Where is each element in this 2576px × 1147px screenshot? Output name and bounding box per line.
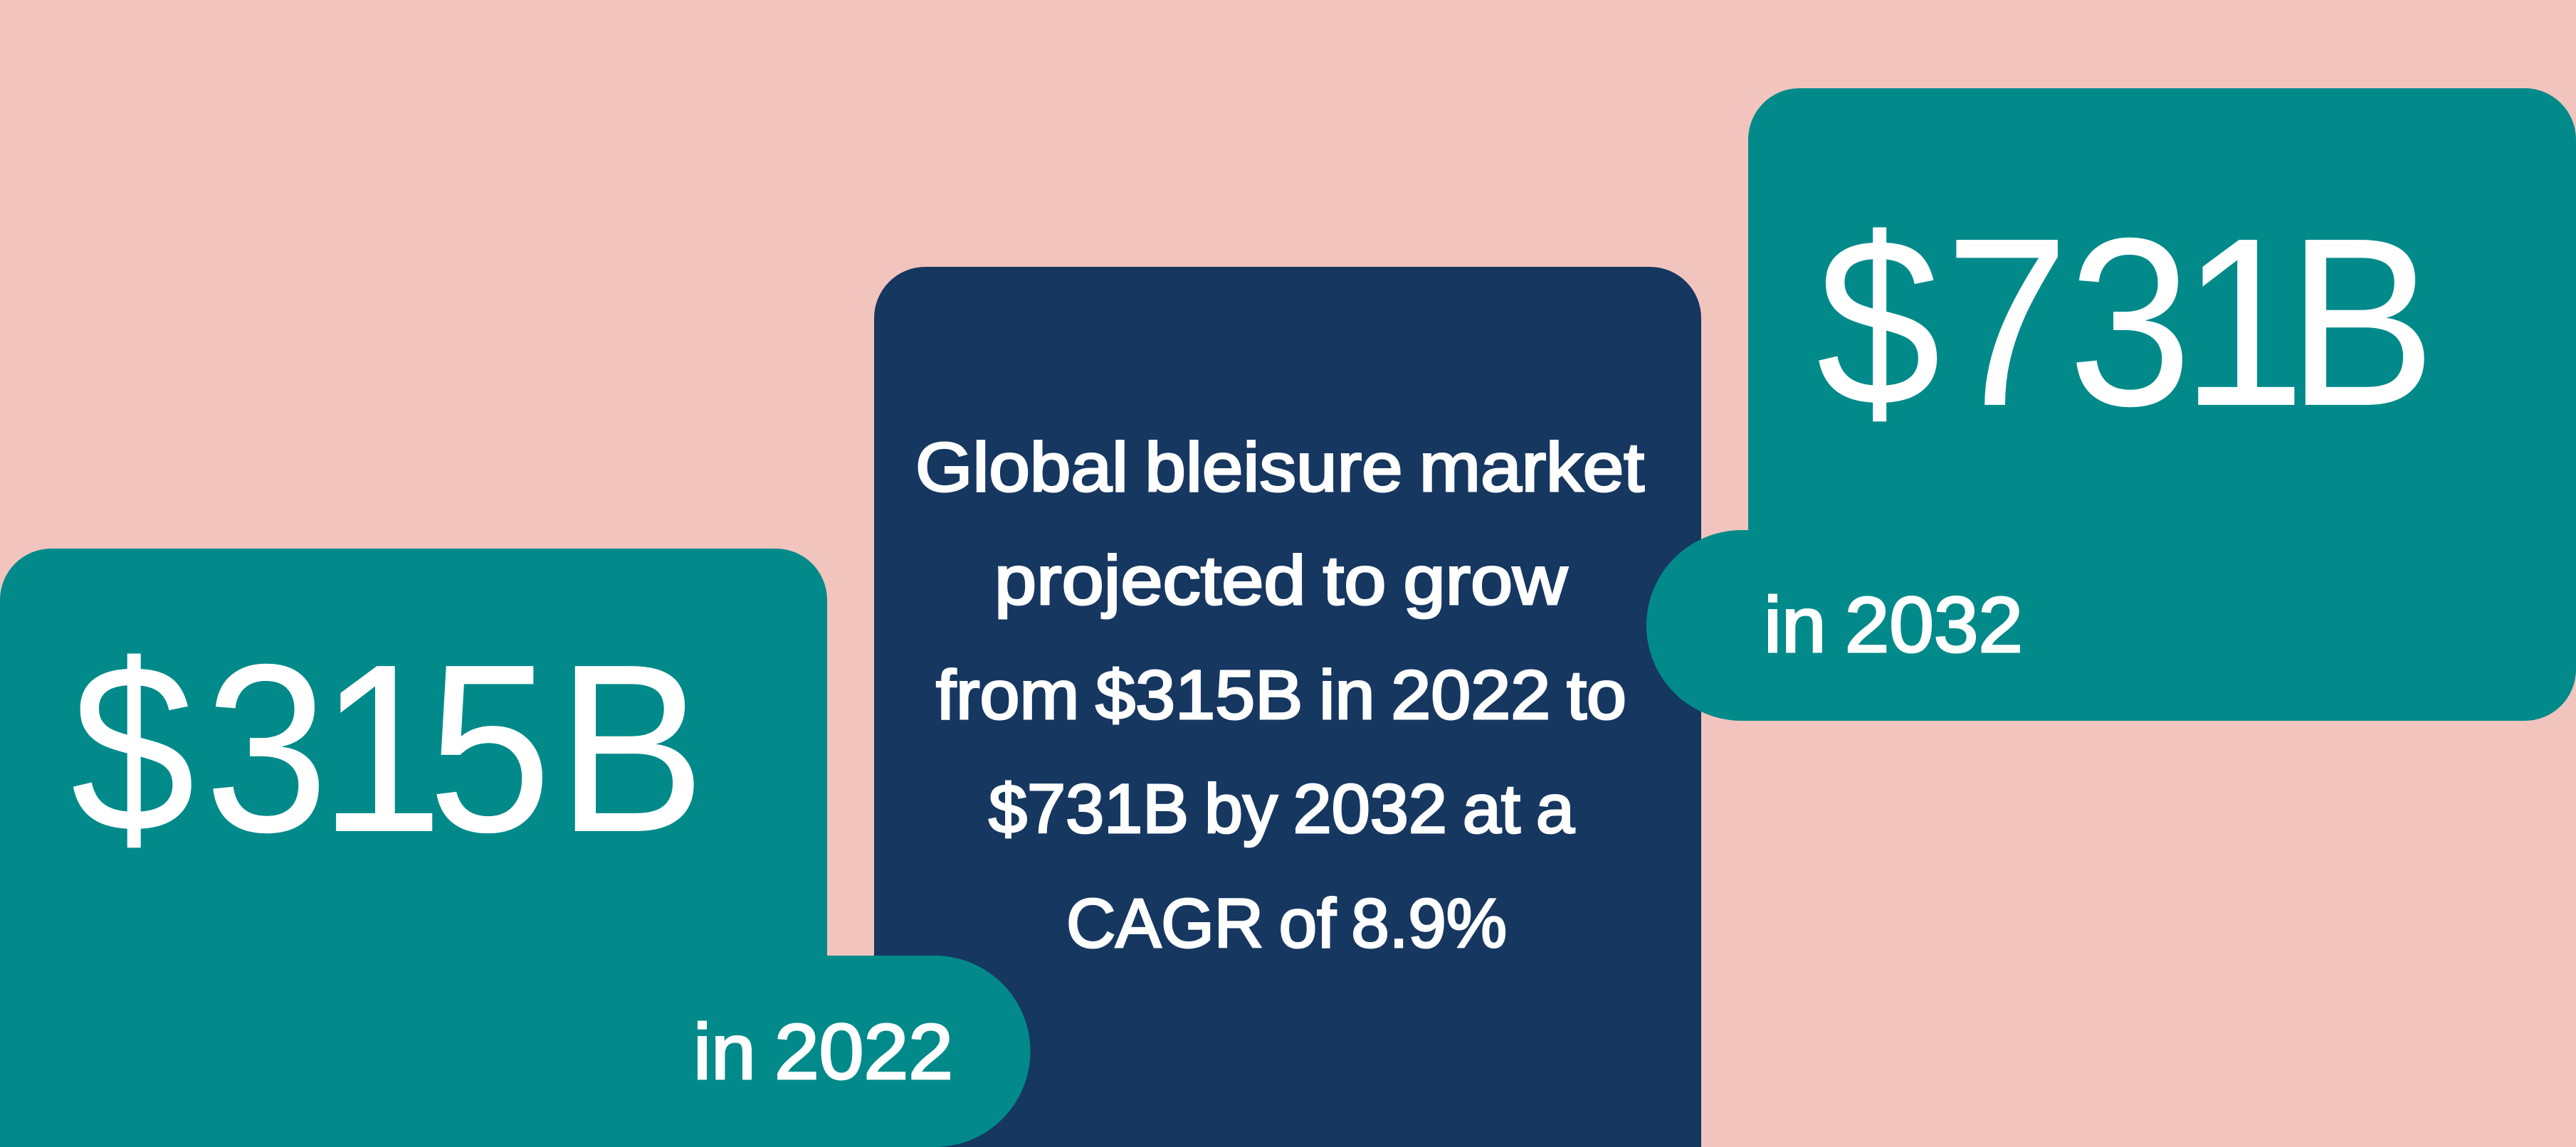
- stat: $731B: $731B: [1817, 188, 2436, 455]
- stat: $315B: $315B: [71, 614, 705, 882]
- label: in 2022: in 2022: [693, 1008, 953, 1096]
- text block: market projection statement: Global bleisure market: [915, 428, 1644, 506]
- panel: central description: [874, 267, 1701, 1147]
- panel: 2022 market value: [0, 549, 1031, 1147]
- text block: market projection statement: [915, 428, 1644, 962]
- text block: market projection statement: projected to grow: [994, 541, 1568, 619]
- text block: market projection statement: CAGR of 8.9%: [1066, 884, 1507, 962]
- panel: 2032 market value: [1646, 88, 2576, 721]
- text block: market projection statement: $731B by 2032 at a: [989, 770, 1574, 847]
- text block: market projection statement: from $315B in 2022 to: [936, 656, 1626, 734]
- label: in 2032: in 2032: [1764, 581, 2023, 669]
